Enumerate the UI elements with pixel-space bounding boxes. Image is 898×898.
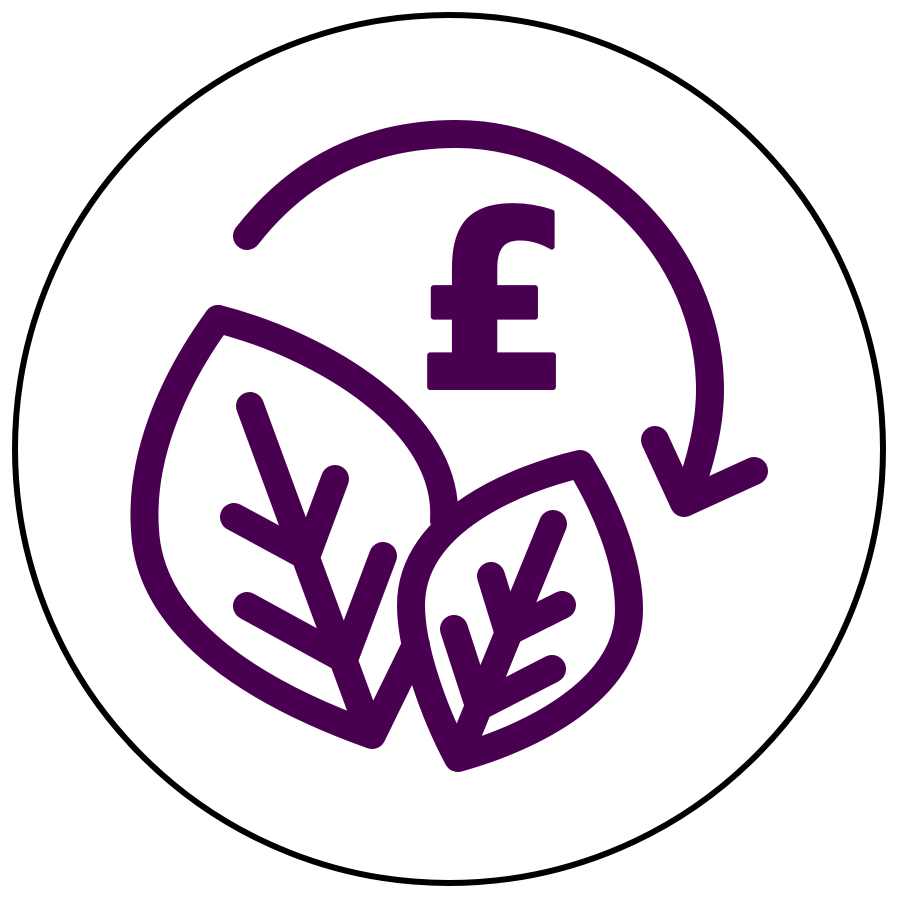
icon: small leaf [411,464,629,758]
icon: large leaf [144,319,444,735]
icon: pound sign: £ [416,162,572,445]
icon: circular arrow [247,134,754,503]
